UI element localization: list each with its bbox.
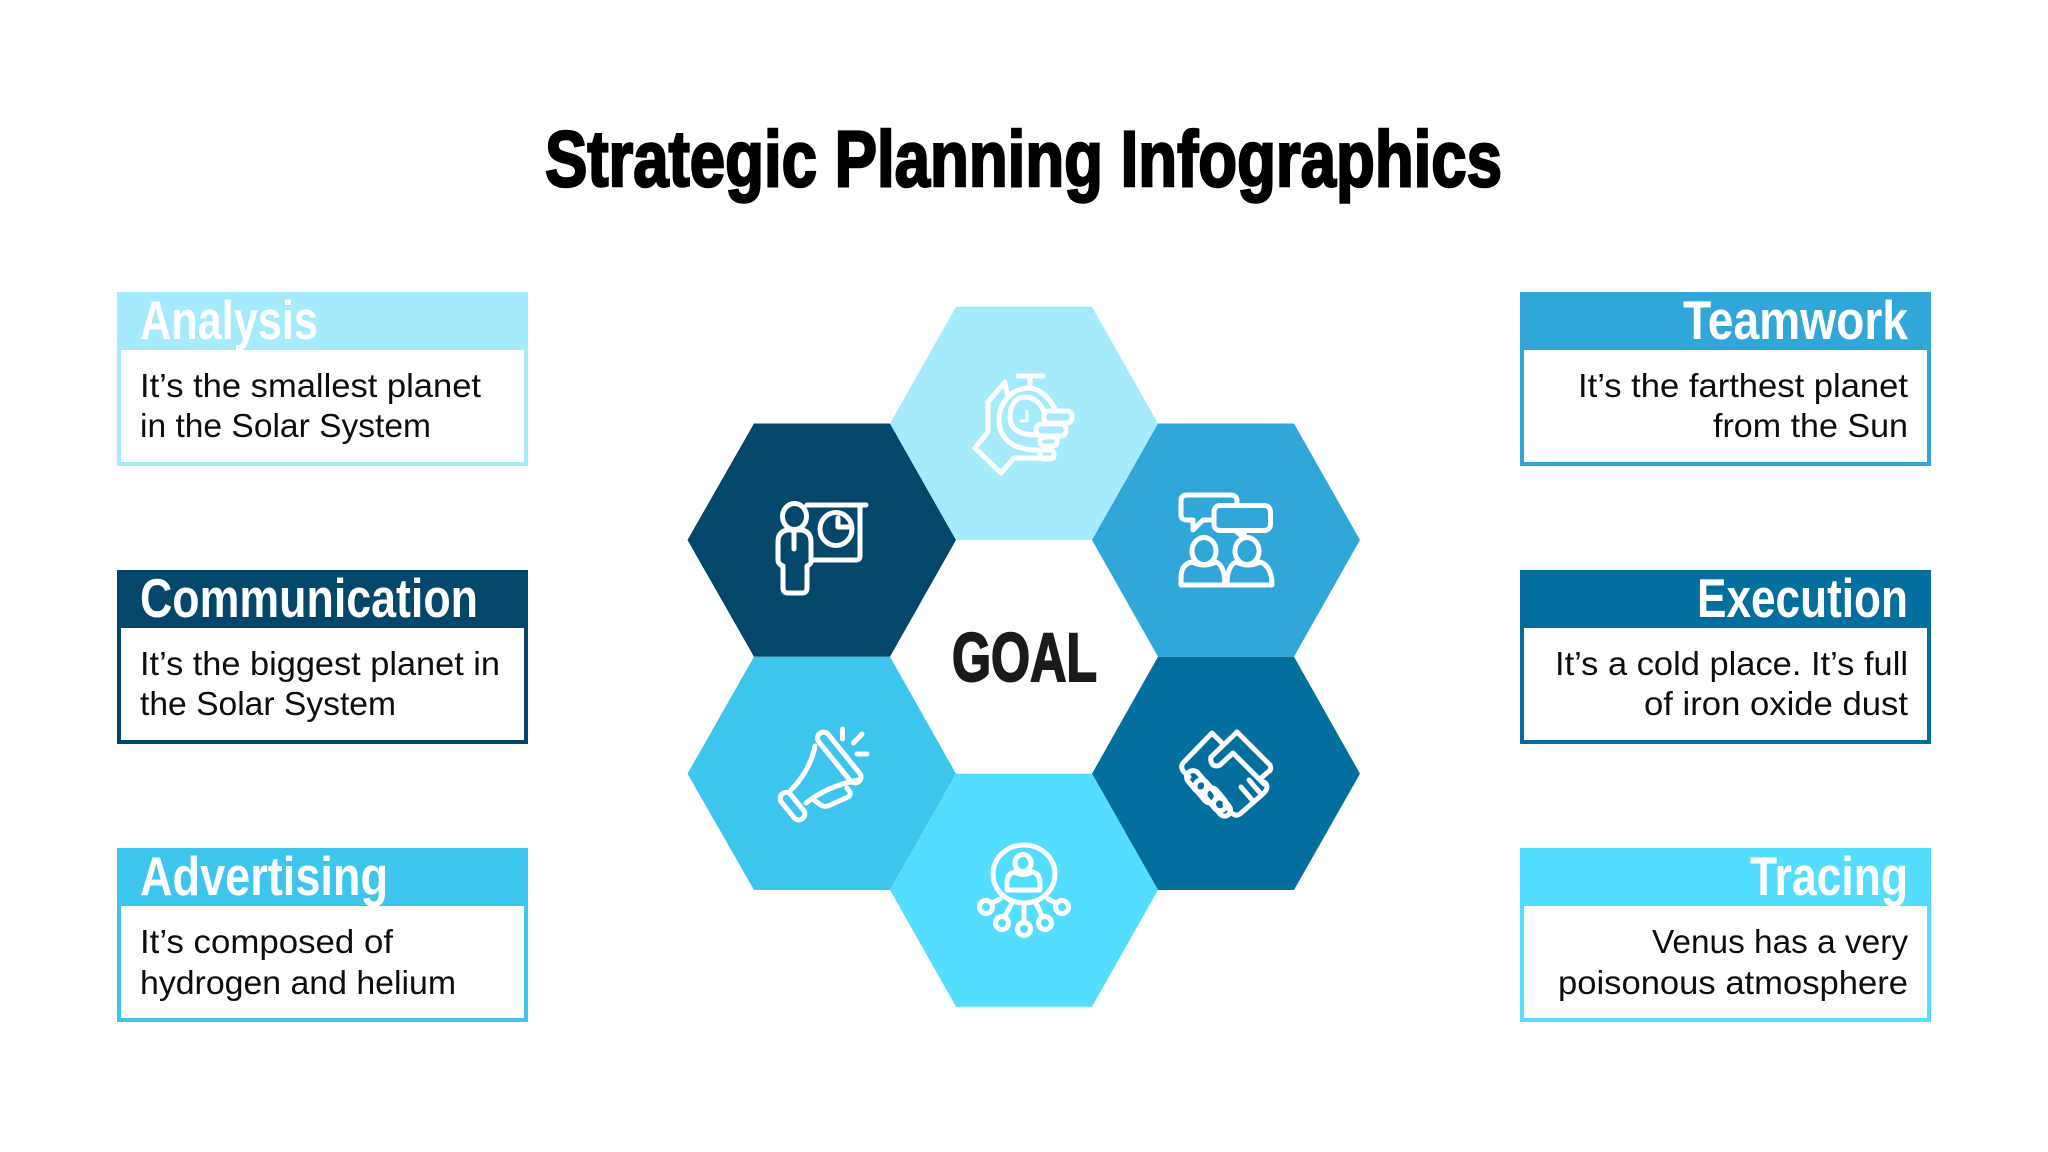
text: Communication description: It’s the biggest planet in [140, 645, 500, 682]
heading: Teamwork: Teamwork [1683, 289, 1908, 351]
text: Advertising description: It’s composed of [140, 923, 394, 960]
heading: Advertising: Advertising [140, 845, 388, 907]
icon: two people talking [1181, 495, 1272, 585]
icon: presenter with chart board [778, 504, 866, 593]
icon: megaphone [778, 729, 867, 822]
text: Execution description: of iron oxide dust [1644, 685, 1908, 722]
text: Advertising description: hydrogen and helium [140, 964, 456, 1001]
icon: person network [980, 845, 1068, 936]
text: Analysis description: It’s the smallest planet [140, 367, 481, 404]
panel: Teamwork [1520, 289, 1931, 464]
heading: Communication: Communication [140, 567, 478, 629]
hexagon: Teamwork [1092, 424, 1360, 657]
hexagon: Analysis light [890, 307, 1158, 540]
text: Advertising description [140, 923, 456, 1001]
text: Teamwork description: It’s the farthest planet [1578, 367, 1908, 404]
text: Analysis description: in the Solar System [140, 407, 431, 444]
text: Tracing description: poisonous atmosphere [1558, 964, 1908, 1001]
panel: Analysis [117, 289, 528, 464]
text: Tracing description: Venus has a very [1652, 923, 1909, 960]
text: Execution description [1555, 645, 1908, 722]
title: Strategic Planning Infographics [545, 114, 1502, 203]
panel: Advertising [117, 845, 528, 1020]
text: Communication description [140, 645, 500, 722]
text: Tracing description [1558, 923, 1909, 1001]
text: Teamwork description: from the Sun [1713, 407, 1908, 444]
text: Analysis description [140, 367, 481, 444]
center label: GOAL: GOAL [952, 619, 1097, 696]
hexagon: Execution [1092, 657, 1360, 890]
text: Execution description: It’s a cold place. It’s full [1555, 645, 1908, 682]
icon: handshake [1182, 732, 1271, 819]
panel: Communication [117, 567, 528, 742]
panel: Tracing [1520, 845, 1931, 1020]
hexagon: Advertising [688, 657, 956, 890]
text: Communication description: the Solar System [140, 685, 396, 722]
heading: Execution: Execution [1697, 567, 1908, 629]
icon: hand holding stopwatch [975, 376, 1072, 473]
hexagon: Tracing [890, 774, 1158, 1007]
hexagon: Communication dark [688, 424, 956, 657]
panel: Execution [1520, 567, 1931, 742]
heading: Tracing: Tracing [1750, 845, 1908, 907]
heading: Analysis: Analysis [140, 289, 318, 351]
text: Teamwork description [1578, 367, 1908, 444]
